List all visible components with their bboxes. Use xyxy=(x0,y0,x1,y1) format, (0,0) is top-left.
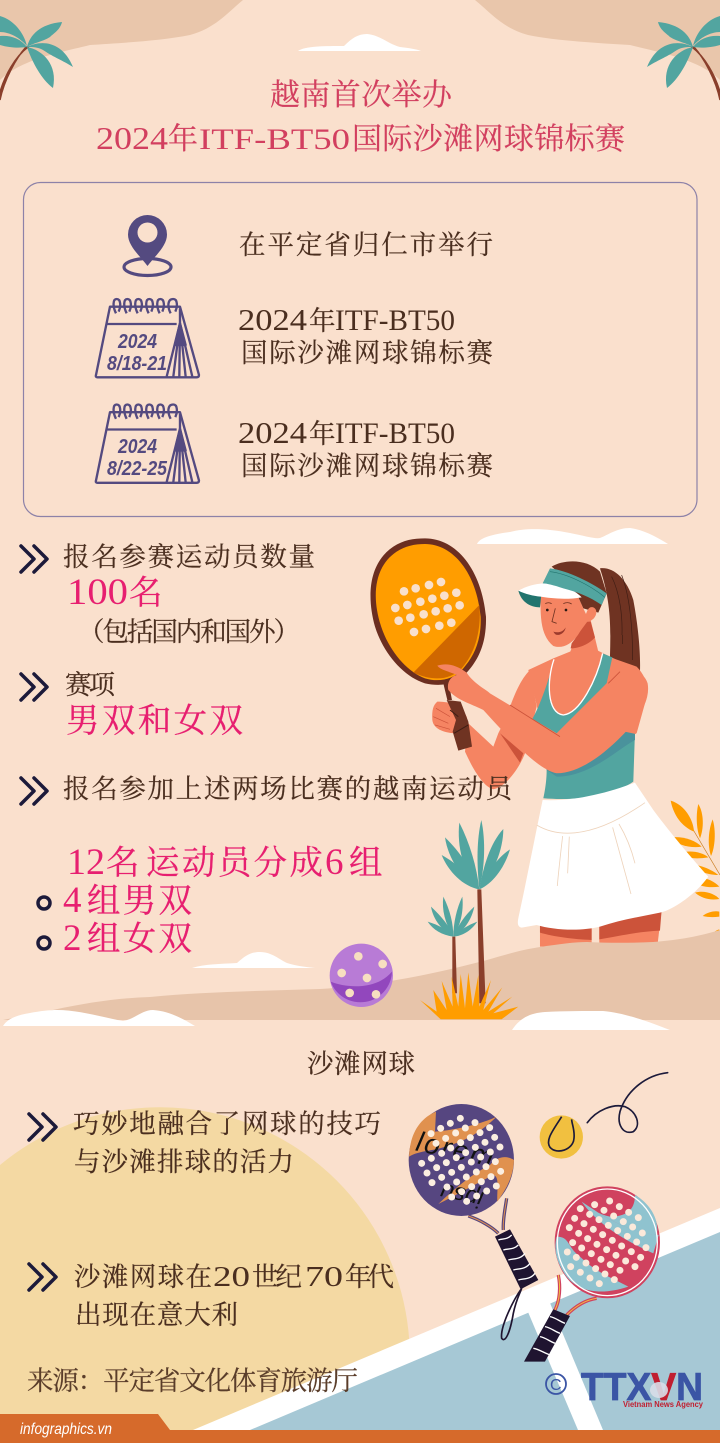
icon: chevron xyxy=(21,674,47,700)
illustration: rackets and ball xyxy=(409,1073,668,1362)
text: venue: 在平定省归仁市举行 xyxy=(239,230,493,260)
mid cloud xyxy=(192,952,315,968)
icon: location pin xyxy=(124,215,171,276)
text: number of athletes: 100 xyxy=(67,572,128,613)
orange grass xyxy=(420,972,518,1019)
hair xyxy=(552,561,607,613)
title xyxy=(96,79,625,156)
illustration: ball and small palms xyxy=(330,820,518,1019)
racket grip xyxy=(447,700,472,751)
footer strip: infographics.vn xyxy=(20,1421,112,1438)
icon: chevron xyxy=(21,546,47,572)
racket xyxy=(370,538,486,685)
text: origin: 20 xyxy=(213,1261,250,1293)
text: origin: 出现在意大利 xyxy=(75,1300,238,1330)
torso xyxy=(528,650,647,733)
illustration: player holding racket xyxy=(370,538,648,799)
text: groups: 名 xyxy=(106,845,140,882)
icon: right palm tree xyxy=(647,16,720,100)
cloud behind player xyxy=(477,528,668,544)
logo: TTXVN copyright: C xyxy=(550,1377,562,1394)
red racket xyxy=(524,1186,660,1362)
text: groups: 6 xyxy=(325,842,344,883)
purple racket xyxy=(409,1104,538,1340)
text: events: 赛项 xyxy=(65,670,116,700)
text: groups xyxy=(67,842,382,883)
palm leaves xyxy=(428,820,510,937)
heading: beach tennis: 沙滩网球 xyxy=(307,1049,415,1079)
icon: chevron xyxy=(29,1114,56,1140)
text: source: 来源：平定省文化体育旅游厅 xyxy=(27,1366,358,1396)
racket stem xyxy=(443,683,452,700)
icon: calendar 8/18-21: 8/18-21 xyxy=(107,353,167,375)
text: events: 男双和女双 xyxy=(66,703,243,740)
bottom right cloud xyxy=(512,1011,670,1030)
text: description: 巧妙地融合了网球的技巧 xyxy=(73,1109,381,1139)
text: groups: 组 xyxy=(349,845,382,882)
icon: bullet xyxy=(38,897,50,909)
text: origin: 世纪 xyxy=(252,1262,302,1292)
icon: calendar 8/22-25 xyxy=(96,404,199,483)
top right sand xyxy=(475,0,720,80)
palm trunks xyxy=(452,889,486,1003)
top cloud xyxy=(298,34,421,51)
text: first tournament xyxy=(238,302,494,368)
icon: calendar 8/22-25: 2024 xyxy=(117,436,157,458)
tennis ball xyxy=(540,1115,583,1159)
purple racket: ipsu xyxy=(438,1178,486,1213)
icon: orange leaves xyxy=(670,801,720,938)
purple racket: lorem xyxy=(414,1126,497,1172)
flight squiggle xyxy=(587,1073,668,1132)
ball xyxy=(330,944,393,1007)
text: second tournament xyxy=(238,415,494,481)
icon: calendar 8/18-21: 2024 xyxy=(117,331,157,353)
icon: calendar 8/22-25: 8/22-25 xyxy=(107,458,168,480)
bottom left cloud xyxy=(3,1010,195,1026)
logo: TTXVN copyright: Vietnam News Agency xyxy=(623,1400,704,1409)
title: 越南首次举办 xyxy=(270,79,453,112)
icon: bullet xyxy=(38,937,50,949)
illustration: skirt and legs xyxy=(518,783,708,947)
text: origin: 沙滩网球在 xyxy=(74,1262,212,1292)
text: second tournament: 2024 xyxy=(238,415,308,450)
title: 2024 xyxy=(96,120,168,156)
text: origin: 年代 xyxy=(345,1262,394,1292)
text: number of athletes: （包括国内和国外） xyxy=(78,617,300,647)
front arm xyxy=(437,664,648,773)
text: groups: 12 xyxy=(67,842,105,883)
sand dune xyxy=(3,930,720,1020)
text: first tournament: ITF-BT50 xyxy=(335,304,455,337)
text: origin xyxy=(74,1261,394,1330)
text: first tournament: 年 xyxy=(309,306,336,336)
logo: TTXVN copyright: TTXVN xyxy=(581,1366,703,1409)
back arm xyxy=(465,670,537,789)
text: second tournament: 国际沙滩网球锦标赛 xyxy=(241,451,494,481)
top left sand xyxy=(0,0,243,80)
tank top xyxy=(532,653,635,799)
text: second tournament: 年 xyxy=(309,419,336,449)
title: ITF-BT50 xyxy=(199,123,350,156)
title: 年 xyxy=(168,123,198,156)
text: men's doubles: 4 xyxy=(63,880,82,921)
skin under arm xyxy=(613,680,645,734)
icon: calendar 8/18-21 xyxy=(96,299,199,377)
text: description: 与沙滩排球的活力 xyxy=(74,1147,294,1177)
text: women's doubles: 2 xyxy=(63,918,82,959)
text: groups: 运动员分成 xyxy=(146,845,323,882)
visor xyxy=(518,591,541,607)
footer strip xyxy=(0,1414,720,1443)
text: origin: 70 xyxy=(305,1261,343,1293)
lower hand xyxy=(432,702,467,734)
text: second tournament: ITF-BT50 xyxy=(335,417,455,450)
panel: event details xyxy=(24,182,697,516)
title: 国际沙滩网球锦标赛 xyxy=(352,123,625,156)
text: women's doubles: 组女双 xyxy=(87,921,192,958)
court xyxy=(193,1208,720,1430)
chevrons and registration text xyxy=(21,542,514,959)
ponytail xyxy=(600,568,640,672)
text: events xyxy=(65,670,243,740)
text: first tournament: 2024 xyxy=(238,302,308,337)
text: vietnamese athletes: 报名参加上述两场比赛的越南运动员 xyxy=(63,774,514,804)
text: number of athletes: 报名参赛运动员数量 xyxy=(63,542,315,572)
text: description xyxy=(73,1109,381,1177)
yellow circle xyxy=(0,1107,410,1430)
text: number of athletes: 名 xyxy=(129,575,162,612)
text: first tournament: 国际沙滩网球锦标赛 xyxy=(241,338,494,368)
icon: left palm tree xyxy=(0,16,73,100)
text: men's doubles: 组男双 xyxy=(87,883,192,920)
face xyxy=(541,597,596,647)
text: number of athletes xyxy=(63,542,315,647)
neck xyxy=(570,620,598,652)
icon: chevron xyxy=(21,778,47,804)
icon: chevron xyxy=(29,1264,56,1290)
